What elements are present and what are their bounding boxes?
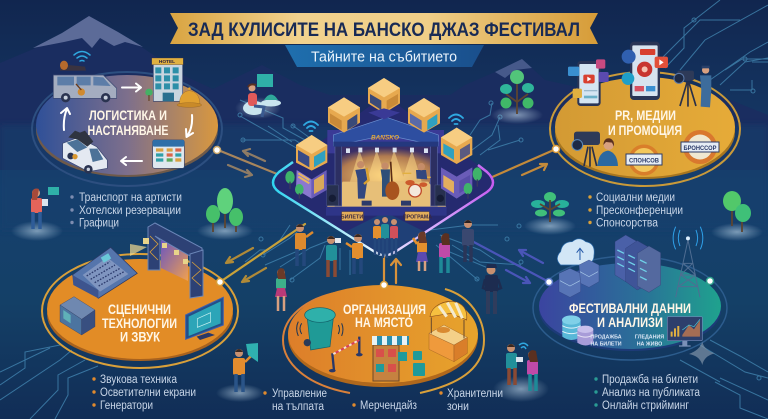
list: storage zones: зони bbox=[447, 401, 469, 413]
panel: technology and sound bbox=[42, 223, 238, 368]
heading: PR: И ПРОМОЦИЯ bbox=[608, 123, 682, 138]
heading: data bbox=[569, 301, 691, 330]
icon: crowd barrier bbox=[329, 337, 363, 372]
list: logistics: Транспорт на артисти bbox=[79, 192, 182, 204]
person: operator with tablet bbox=[216, 343, 264, 402]
person: man orange top 2 bbox=[346, 234, 363, 274]
list: crowd management bbox=[263, 388, 327, 413]
panel: logistics bbox=[32, 52, 222, 186]
list: PR bbox=[588, 192, 683, 230]
stage: BANSKO bbox=[371, 134, 400, 141]
heading: technology: И ЗВУК bbox=[120, 330, 161, 344]
icon: cameraman right bbox=[674, 66, 711, 107]
stage bbox=[326, 117, 447, 221]
icons: wifi near stage bbox=[304, 114, 463, 131]
list: technology bbox=[92, 374, 196, 412]
list: logistics: Графици bbox=[79, 218, 119, 230]
icons: festival cubes bbox=[285, 78, 482, 199]
arrows: PR link bbox=[490, 149, 556, 178]
icon: analytics monitor bbox=[667, 317, 702, 347]
list: PR: Спонсорства bbox=[596, 218, 659, 230]
list: data: Онлайн стрийминг bbox=[602, 400, 689, 412]
list: PR: Социални медии bbox=[596, 192, 675, 204]
panel: logistics: HOTEL bbox=[159, 59, 175, 65]
label: live views bbox=[635, 334, 664, 348]
heading: data: ФЕСТИВАЛНИ ДАННИ bbox=[569, 301, 691, 316]
icon: smart bin bbox=[297, 308, 343, 350]
list: technology: Звукова техника bbox=[100, 374, 178, 386]
list: storage zones: Хранителни bbox=[447, 388, 503, 400]
icon: van with guitar bbox=[53, 61, 117, 102]
panel: stage platform bbox=[273, 78, 493, 256]
heading: logistics: ЛОГИСТИКА И bbox=[89, 108, 167, 123]
icon: sponsor badges: СПОНСОВ bbox=[629, 158, 659, 164]
list: storage zones bbox=[439, 388, 503, 413]
icon: calendar bbox=[153, 140, 184, 168]
heading: data: И АНАЛИЗИ bbox=[597, 315, 663, 330]
arrows: tech link bbox=[220, 224, 305, 282]
person: woman with tablet bbox=[11, 187, 63, 241]
arrows: data link bbox=[470, 240, 549, 283]
person: man dark suit bbox=[462, 220, 474, 262]
title banner bbox=[170, 13, 598, 44]
icon: cloud servers bbox=[557, 239, 599, 297]
subtitle ribbon: Тайните на събитието bbox=[311, 48, 457, 66]
mountains bbox=[0, 16, 768, 230]
list: crowd management: на тълпата bbox=[272, 401, 325, 413]
heading: logistics bbox=[88, 108, 168, 138]
heading: organisation: НА МЯСТО bbox=[355, 315, 413, 330]
panel: PR bbox=[550, 42, 740, 186]
person: man orange top bbox=[295, 224, 313, 266]
person: security guard bbox=[483, 264, 501, 314]
list: technology: Осветителни екрани bbox=[100, 387, 196, 399]
list: technology: Генератори bbox=[100, 400, 153, 412]
heading: organisation: ОРГАНИЗАЦИЯ bbox=[343, 302, 426, 317]
connector arrows bbox=[218, 149, 556, 285]
icon: display bbox=[186, 297, 223, 340]
label: ticket sales bbox=[590, 334, 622, 348]
label: tickets: БИЛЕТИ bbox=[341, 214, 363, 220]
arrows: logistics link bbox=[218, 149, 282, 177]
icon: merchandise stall bbox=[372, 336, 425, 381]
title: ЗАД КУЛИСИТЕ НА БАНСКО ДЖАЗ ФЕСТИВАЛ bbox=[188, 19, 580, 41]
chip bbox=[689, 342, 715, 365]
heading: technology: СЦЕНИЧНИ bbox=[108, 302, 171, 317]
icon: camera and reporter bbox=[572, 132, 618, 167]
label: live views: ГЛЕДАНИЯ bbox=[635, 334, 664, 340]
person: woman purple skirt bbox=[413, 232, 428, 271]
heading: logistics: НАСТАНЯВАНЕ bbox=[88, 123, 168, 138]
list: merchandise: Мерчендайз bbox=[360, 400, 417, 412]
icon: signal tower bbox=[673, 227, 703, 297]
list: data: Продажба на билети bbox=[602, 374, 698, 386]
person: woman green top bbox=[275, 268, 287, 311]
arrows: organisation link bbox=[384, 255, 401, 285]
list: logistics: Хотелски резервации bbox=[79, 205, 181, 217]
icon: sponsor badges bbox=[626, 130, 719, 176]
arrows: logistics cycle bbox=[61, 84, 193, 165]
icon: generator bbox=[60, 297, 95, 335]
label: live views: НА ЖИВО bbox=[637, 342, 662, 348]
icon: hotel bbox=[145, 58, 202, 107]
subtitle ribbon bbox=[285, 45, 484, 67]
person: woman magenta top bbox=[439, 233, 450, 273]
list: PR: Пресконференции bbox=[596, 205, 683, 217]
label: ticket sales: НА БИЛЕТИ bbox=[590, 342, 622, 348]
icon: food stall bbox=[429, 301, 467, 362]
label: ticket sales: ПРОДАЖБА bbox=[590, 334, 622, 340]
panel: on-site organisation bbox=[283, 282, 484, 393]
icon: white van bbox=[63, 131, 107, 174]
list: logistics bbox=[70, 192, 182, 230]
icon: phones and social media bbox=[568, 42, 668, 106]
icon: truss with screen bbox=[130, 223, 203, 298]
people bbox=[11, 74, 549, 402]
heading: organisation bbox=[343, 302, 426, 330]
icon: sponsor badges: БРОНССОР bbox=[684, 145, 717, 152]
panel: data and analytics bbox=[533, 227, 727, 365]
heading: PR: PR, МЕДИИ bbox=[615, 108, 676, 123]
list: data bbox=[594, 374, 701, 412]
list: data: Анализ на публиката bbox=[602, 387, 701, 399]
person: laptop user bbox=[235, 74, 281, 119]
label: programme: ПРОГРАМА bbox=[403, 214, 432, 220]
heading: PR bbox=[608, 108, 682, 138]
list: crowd management: Управление bbox=[272, 388, 327, 400]
heading: technology: ТЕХНОЛОГИИ bbox=[102, 316, 177, 331]
icon: server racks bbox=[615, 235, 661, 292]
icon: mixing console bbox=[72, 247, 137, 298]
icon: database bbox=[562, 315, 593, 345]
heading: technology bbox=[102, 302, 177, 344]
icon: wifi bbox=[74, 52, 90, 61]
audience at stage bbox=[373, 217, 398, 258]
person: man teal top bbox=[326, 236, 341, 277]
people: two colleagues with wifi bbox=[493, 343, 549, 402]
trees bbox=[197, 70, 763, 241]
